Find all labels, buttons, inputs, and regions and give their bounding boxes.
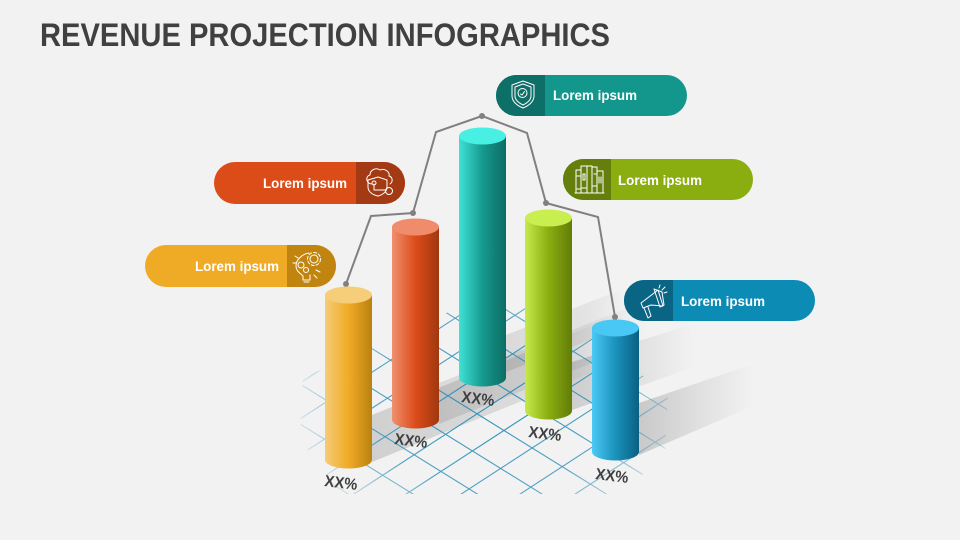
icon: cloud and key xyxy=(367,169,392,196)
pill: blue xyxy=(624,280,815,321)
pill: blue: Lorem ipsum xyxy=(681,294,765,309)
value label: red: XX% xyxy=(394,431,428,452)
icon: lightbulb and gears xyxy=(293,252,320,282)
pill: yellow: Lorem ipsum xyxy=(195,259,279,274)
icon: megaphone xyxy=(641,285,667,318)
value label: blue: XX% xyxy=(595,466,629,487)
cylinder: blue xyxy=(592,320,639,460)
pill: teal xyxy=(496,75,687,116)
icon: books xyxy=(575,166,604,193)
pill: yellow xyxy=(145,245,336,287)
value label: green: XX% xyxy=(528,424,562,445)
cylinder: red xyxy=(392,218,439,428)
pill: teal: Lorem ipsum xyxy=(553,88,637,103)
cylinder: teal xyxy=(459,128,506,386)
value label: yellow: XX% xyxy=(324,473,358,494)
pill: orange xyxy=(214,162,405,204)
cylinder: yellow xyxy=(325,286,372,468)
cast shadows xyxy=(372,290,760,462)
floor grid xyxy=(300,308,668,494)
title: REVENUE PROJECTION INFOGRAPHICS xyxy=(40,17,610,53)
pill: orange: Lorem ipsum xyxy=(263,176,347,191)
pill: green: Lorem ipsum xyxy=(618,173,702,188)
connector line xyxy=(343,113,618,320)
icon: shield with check xyxy=(512,81,534,108)
pill: green xyxy=(563,159,753,200)
value label: teal: XX% xyxy=(461,389,495,410)
cylinder: green xyxy=(525,210,572,420)
